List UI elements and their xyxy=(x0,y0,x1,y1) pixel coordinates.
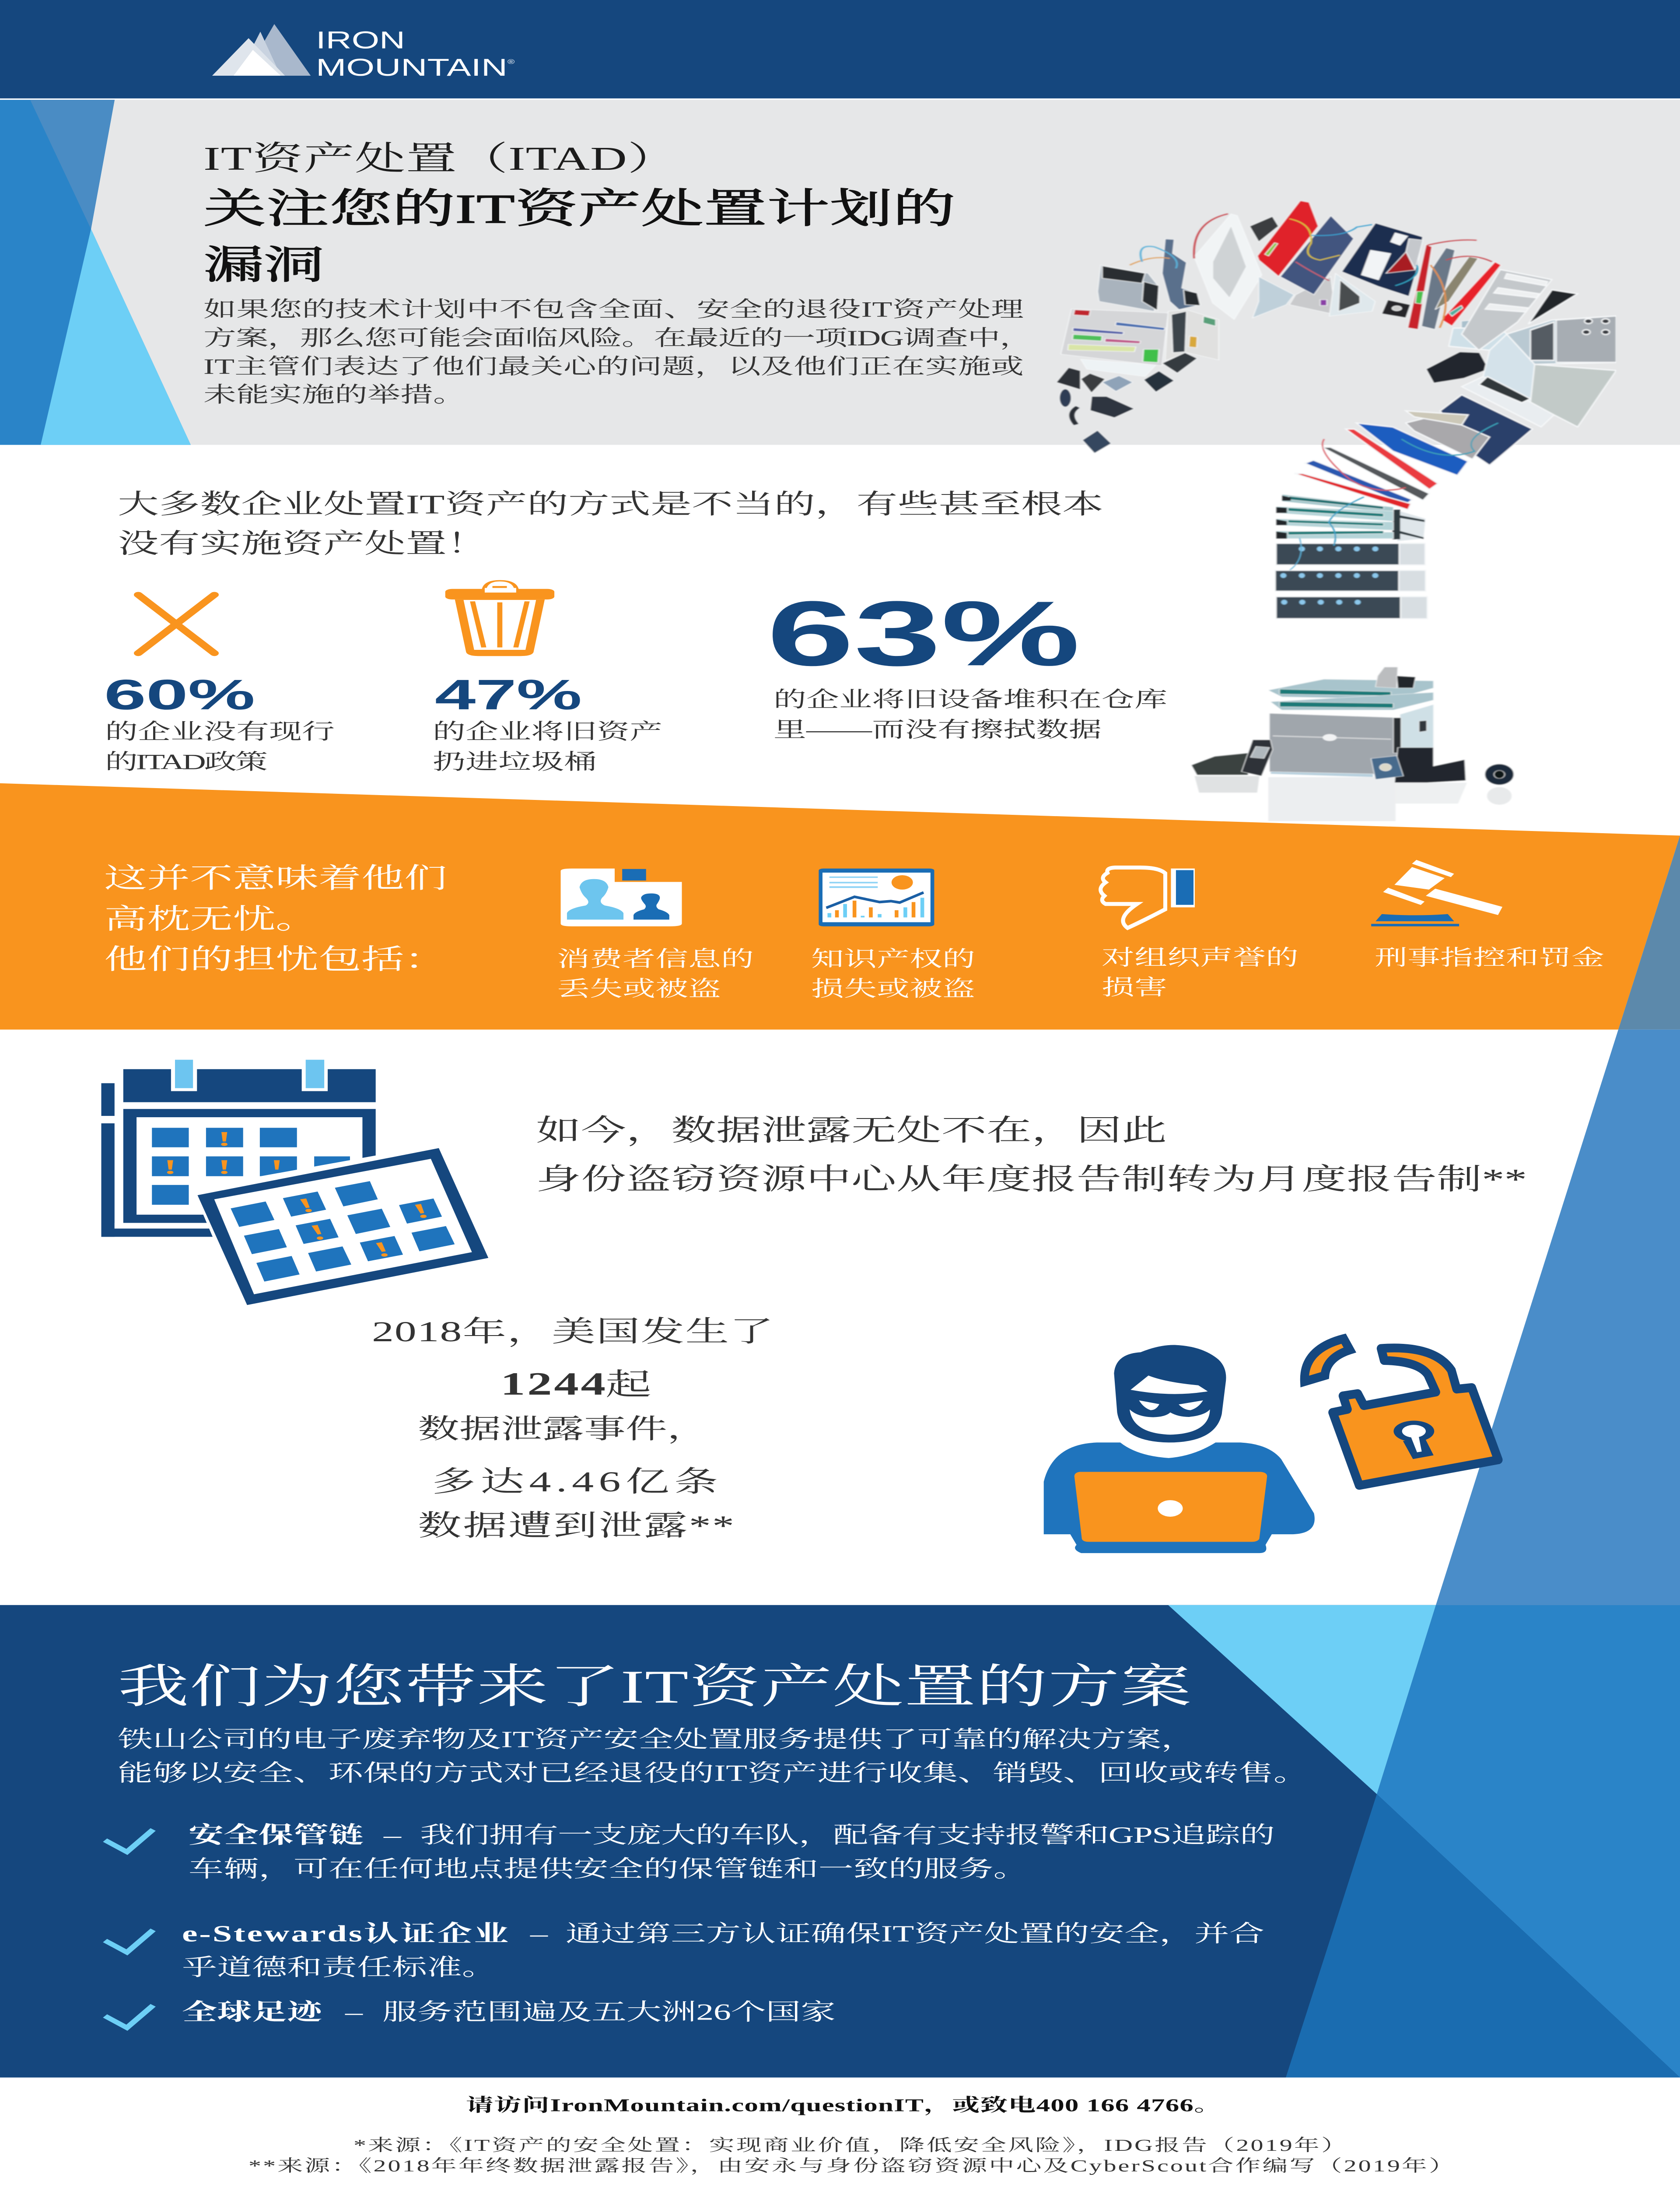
icon: check 2 xyxy=(105,1930,153,1952)
text block: breach statistics: 多达4.46亿条 xyxy=(432,1466,718,1498)
icon: check 1 xyxy=(105,1830,153,1852)
bullet: global footprint: – xyxy=(345,1999,363,2025)
text block: disposal lead-in: 没有实施资产处置！ xyxy=(118,529,488,559)
label: criminal charges: 刑事指控和罚金 xyxy=(1375,945,1604,970)
heading: intro headline: 关注您的IT资产处置计划的 xyxy=(203,186,956,232)
stat: 63 percent: 里——而没有擦拭数据 xyxy=(774,718,1102,742)
heading: intro headline: 漏洞 xyxy=(203,243,324,288)
label: reputation: 损害 xyxy=(1102,975,1167,999)
bullet: chain of custody: 我们拥有一支庞大的车队，配备有支持报警和GPS追踪的 xyxy=(420,1822,1275,1848)
decoration: left blue triangles xyxy=(0,100,191,445)
icon: orange X xyxy=(138,595,214,653)
stat: 63 percent: 63% xyxy=(767,582,1080,685)
heading: concerns: 他们的担忧包括： xyxy=(104,943,447,975)
text block: intro paragraph xyxy=(203,297,1032,407)
bullet: chain of custody: – xyxy=(383,1822,402,1848)
label: reputation: 对组织声誉的 xyxy=(1102,945,1298,970)
icon: ID card xyxy=(561,869,682,926)
label: intellectual property: 损失或被盗 xyxy=(811,976,975,1001)
stat: 63 percent xyxy=(767,582,1167,742)
heading: intro headline xyxy=(203,186,956,288)
logo: Iron Mountain xyxy=(212,24,515,81)
icon: hacker with laptop xyxy=(1044,1345,1315,1553)
stat: 47 percent: 47% xyxy=(435,671,582,719)
heading: concerns xyxy=(104,863,447,975)
stat: 60 percent: 的ITAD政策 xyxy=(105,750,268,774)
panel: solutions background xyxy=(0,1605,1680,2078)
text block: breach statistics: 2018年，美国发生了 xyxy=(372,1316,774,1348)
panel: header bar xyxy=(0,0,1680,98)
label: consumer information xyxy=(557,947,754,1001)
bullet: chain of custody: 安全保管链 xyxy=(189,1822,364,1848)
bullet: chain of custody xyxy=(189,1822,1275,1882)
stat: 47 percent: 扔进垃圾桶 xyxy=(433,750,597,774)
stat: 60 percent: 的企业没有现行 xyxy=(105,719,335,743)
text block: breach statistics: 数据泄露事件， xyxy=(418,1414,709,1444)
footer: sources: *来源：《IT资产的安全处置：实现商业价值，降低安全风险》，IDG报告（2019年） xyxy=(354,2136,1347,2155)
bullet: e-Stewards xyxy=(182,1921,1264,1980)
heading: concerns: 高枕无忧。 xyxy=(104,903,318,935)
text block: disposal lead-in xyxy=(118,490,1103,559)
panel: intro grey background xyxy=(0,100,1680,445)
logo: Iron Mountain: MOUNTAIN xyxy=(316,54,508,81)
text block: solutions intro xyxy=(118,1727,1309,1786)
label: consumer information: 丢失或被盗 xyxy=(557,976,721,1001)
text block: solutions intro: 能够以安全、环保的方式对已经退役的IT资产进行收集、销毁、回收或转售。 xyxy=(118,1760,1309,1786)
label: reputation xyxy=(1102,945,1298,999)
text block: monthly reporting: 身份盗窃资源中心从年度报告制转为月度报告制** xyxy=(536,1163,1527,1196)
text block: breach statistics: 数据遭到泄露** xyxy=(418,1510,734,1542)
bullet: chain of custody: 车辆，可在任何地点提供安全的保管链和一致的服务。 xyxy=(189,1856,1029,1882)
text block: intro paragraph: IT主管们表达了他们最关心的问题，以及他们正在实施或 xyxy=(203,354,1024,379)
heading: solutions: 我们为您带来了IT资产处置的方案 xyxy=(118,1661,1191,1713)
decoration: right blue strip xyxy=(1436,836,1680,1605)
icon: thumbs down xyxy=(1101,868,1195,928)
bullet: global footprint: 全球足迹 xyxy=(182,1999,324,2025)
icon: check 3 xyxy=(105,2005,153,2028)
bullet: global footprint: 服务范围遍及五大洲26个国家 xyxy=(382,1999,836,2025)
icon: calendars xyxy=(102,1060,497,1311)
label: consumer information: 消费者信息的 xyxy=(557,947,754,971)
icon: broken padlock xyxy=(1305,1339,1498,1485)
text block: disposal lead-in: 大多数企业处置IT资产的方式是不当的，有些甚至根本 xyxy=(118,490,1103,519)
text block: breach statistics: 起 xyxy=(606,1368,651,1402)
text block: intro paragraph: 如果您的技术计划中不包含全面、安全的退役IT资产处理 xyxy=(203,297,1024,321)
stat: 60 percent xyxy=(104,671,335,774)
heading: concerns: 这并不意味着他们 xyxy=(104,863,447,894)
image: question mark made of IT equipment xyxy=(1056,200,1616,821)
footer: sources xyxy=(248,2136,1454,2175)
footer: sources: **来源：《2018年年终数据泄露报告》，由安永与身份盗窃资源中心及CyberScout合作编写（2019年） xyxy=(248,2156,1454,2175)
decoration: solutions triangles xyxy=(1168,1605,1680,2078)
text block: intro paragraph: 未能实施的举措。 xyxy=(203,382,466,407)
icon: trash can xyxy=(445,581,554,656)
bullet: e-Stewards: e-Stewards认证企业 xyxy=(182,1921,509,1946)
text block: intro paragraph: 方案，那么您可能会面临风险。在最近的一项IDG调查中， xyxy=(203,326,1032,350)
footer: contact line: 请访问IronMountain.com/questionIT，或致电400 166 4766。 xyxy=(466,2095,1222,2115)
icon: IP chart card xyxy=(819,869,934,926)
bullet: e-Stewards: 乎道德和责任标准。 xyxy=(182,1955,497,1980)
text block: breach statistics xyxy=(372,1316,774,1542)
logo: Iron Mountain: ® xyxy=(508,58,515,65)
bullet: global footprint xyxy=(182,1999,836,2025)
bullet: e-Stewards: – xyxy=(530,1921,548,1946)
label: intellectual property: 知识产权的 xyxy=(811,947,975,971)
stat: 60 percent: 60% xyxy=(104,671,255,719)
stat: 47 percent xyxy=(433,671,662,774)
stat: 63 percent: 的企业将旧设备堆积在仓库 xyxy=(774,687,1167,712)
title: ITAD kicker: IT资产处置（ITAD） xyxy=(203,140,678,177)
stat: 47 percent: 的企业将旧资产 xyxy=(433,719,662,743)
text block: monthly reporting: 如今，数据泄露无处不在，因此 xyxy=(536,1114,1167,1147)
text block: monthly reporting xyxy=(536,1114,1527,1196)
text block: solutions intro: 铁山公司的电子废弃物及IT资产安全处置服务提供了可靠的解决方案， xyxy=(118,1727,1196,1752)
icon: gavel xyxy=(1371,860,1502,926)
logo: Iron Mountain: IRON xyxy=(316,27,405,54)
bullet: e-Stewards: 通过第三方认证确保IT资产处置的安全，并合 xyxy=(566,1921,1264,1946)
panel: orange concerns band xyxy=(0,783,1680,1030)
text block: breach statistics: 1244 xyxy=(500,1366,606,1402)
label: intellectual property xyxy=(811,947,975,1001)
